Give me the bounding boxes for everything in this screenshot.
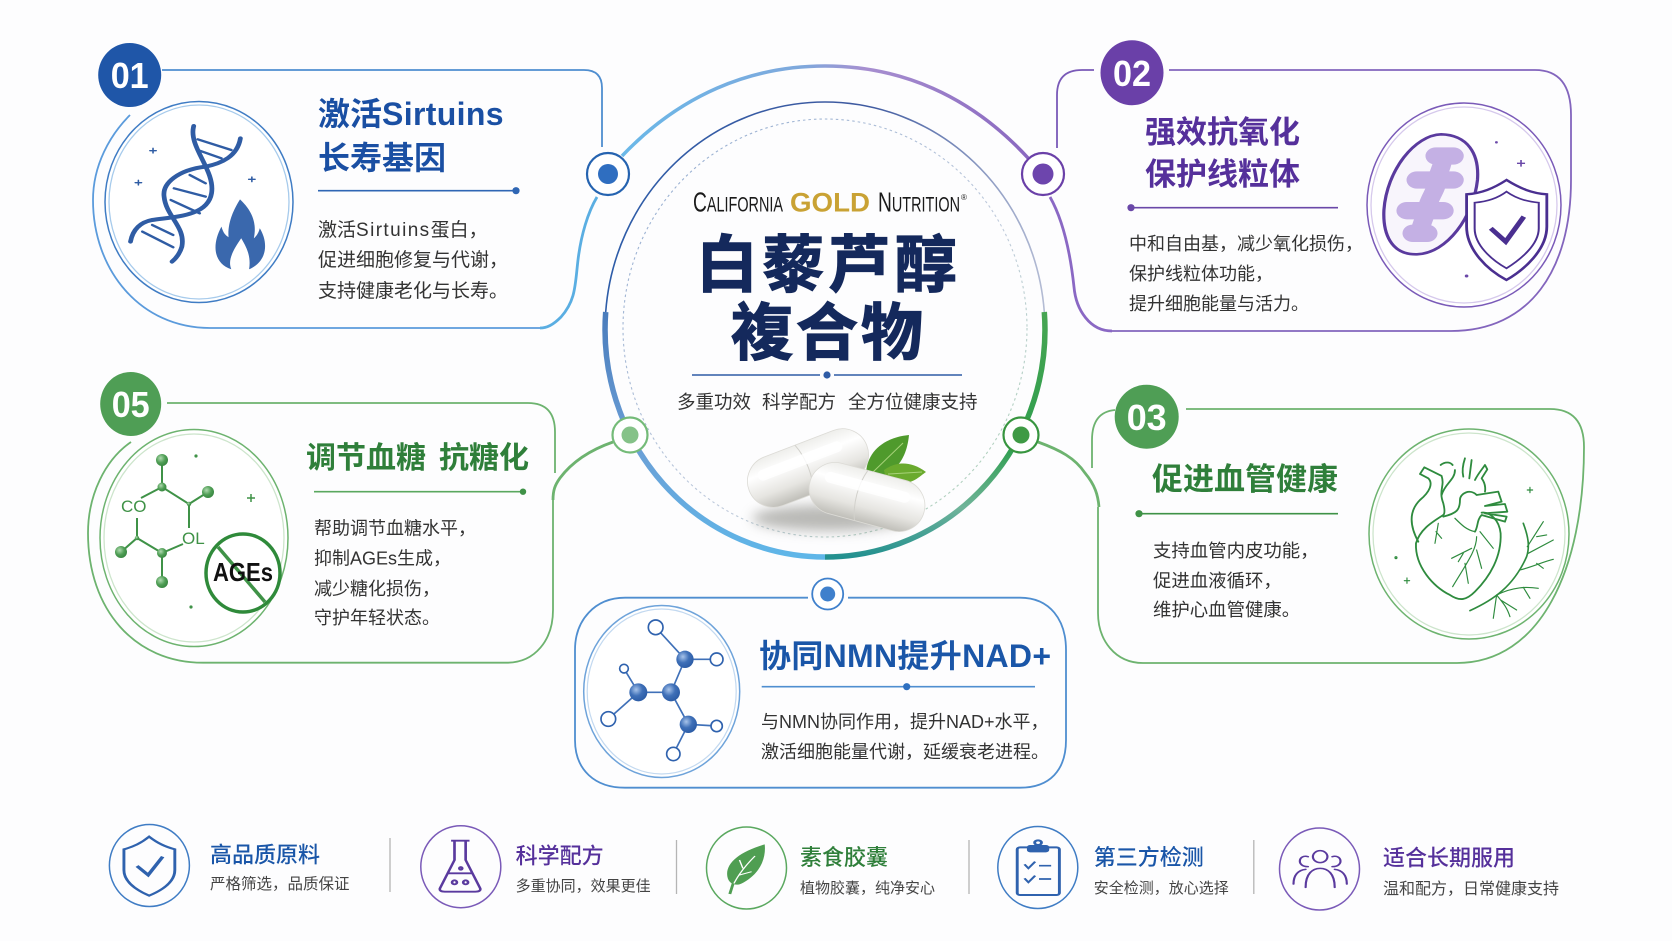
heading 05 bbox=[306, 442, 529, 475]
body 04: 与NMN协同作用，提升NAD+水平， bbox=[761, 712, 1049, 732]
badge 05: 05 bbox=[112, 384, 150, 425]
central ring bbox=[605, 66, 1045, 557]
body 04: 激活细胞能量代谢，延缓衰老进程。 bbox=[761, 742, 1049, 762]
icon: AGEs molecule: AGEs bbox=[213, 557, 273, 587]
icon: AGEs molecule: OL bbox=[182, 529, 205, 548]
card 05 outline bbox=[88, 403, 613, 663]
panel: card 05 bbox=[88, 372, 613, 663]
body 05: 帮助调节血糖水平， bbox=[314, 518, 476, 538]
subtitle: 多重功效 bbox=[677, 392, 751, 413]
title divider bbox=[692, 371, 962, 379]
divider 02 bbox=[1127, 204, 1338, 211]
panel: card 01 bbox=[93, 43, 602, 328]
icon: AGEs molecule bbox=[100, 430, 288, 646]
separator lines bbox=[390, 838, 1254, 894]
feature: third party test: 安全检测，放心选择 bbox=[1094, 879, 1229, 897]
title bbox=[696, 232, 961, 368]
body 01 bbox=[318, 219, 508, 302]
body 05: 抑制AGEs生成， bbox=[314, 548, 451, 568]
body 02: 提升细胞能量与活力。 bbox=[1129, 294, 1309, 314]
card 02 outline bbox=[1050, 70, 1571, 331]
feature: high quality bbox=[109, 824, 350, 906]
feature: long term bbox=[1280, 828, 1559, 910]
heading 01: 长寿基因 bbox=[318, 140, 446, 176]
feature: third party test: 第三方检测 bbox=[1094, 845, 1204, 870]
body 05: 守护年轻状态。 bbox=[314, 608, 440, 628]
heading 01: 激活Sirtuins bbox=[318, 96, 504, 132]
heading 02: 保护线粒体 bbox=[1145, 157, 1300, 192]
badge 02: 02 bbox=[1113, 53, 1151, 94]
logo: CALIFORNIA bbox=[693, 186, 783, 218]
body 01: 激活Sirtuins蛋白， bbox=[318, 219, 488, 241]
icon: DNA and flame bbox=[105, 102, 293, 302]
body 05 bbox=[314, 518, 476, 628]
badge 01 bbox=[98, 43, 161, 107]
divider 04 bbox=[762, 683, 1035, 690]
icon: mitochondrion and shield bbox=[1367, 103, 1561, 307]
badge 05 bbox=[100, 372, 161, 436]
title: 複合物 bbox=[731, 300, 926, 368]
node 01 bbox=[587, 153, 629, 195]
body 03: 支持血管内皮功能， bbox=[1153, 540, 1319, 561]
body 02: 中和自由基，减少氧化损伤， bbox=[1129, 234, 1363, 254]
badge 01: 01 bbox=[111, 55, 149, 96]
divider 05 bbox=[314, 488, 526, 495]
card 04 outline bbox=[575, 598, 1066, 788]
badge 02 bbox=[1100, 40, 1164, 105]
heading 02 bbox=[1145, 115, 1300, 192]
logo bbox=[693, 186, 967, 218]
logo: GOLD bbox=[790, 188, 870, 218]
feature: vegan capsule bbox=[706, 827, 935, 909]
feature: third party test bbox=[998, 826, 1229, 908]
body 03: 促进血液循环， bbox=[1153, 570, 1282, 591]
panel: feature strip bbox=[109, 824, 1559, 910]
feature: high quality: 严格筛选，品质保证 bbox=[210, 875, 350, 893]
body 01: 促进细胞修复与代谢， bbox=[318, 249, 508, 271]
card 03 outline bbox=[1038, 409, 1584, 663]
logo: NUTRITION bbox=[878, 186, 960, 218]
body 02 bbox=[1129, 234, 1363, 314]
panel: card 03 bbox=[1038, 385, 1584, 663]
body 02: 保护线粒体功能， bbox=[1129, 264, 1273, 284]
node 03 bbox=[1004, 418, 1038, 452]
subtitle: 全方位健康支持 bbox=[848, 392, 978, 413]
feature: vegan capsule: 植物胶囊，纯净安心 bbox=[800, 880, 935, 897]
capsules and leaves bbox=[740, 421, 931, 537]
feature: long term: 温和配方，日常健康支持 bbox=[1383, 880, 1559, 898]
feature: science formula bbox=[421, 826, 651, 908]
panel: card 04 bbox=[575, 598, 1066, 788]
connector nodes bbox=[587, 153, 1064, 610]
heading 05: 调节血糖 bbox=[306, 442, 426, 475]
badge 03 bbox=[1115, 385, 1179, 449]
feature: long term: 适合长期服用 bbox=[1383, 845, 1515, 870]
body 03 bbox=[1153, 540, 1319, 620]
heading 03: 促进血管健康 bbox=[1152, 462, 1338, 497]
body 05: 减少糖化损伤， bbox=[314, 579, 440, 599]
icon: heart and vessels bbox=[1369, 429, 1569, 639]
panel: center content bbox=[677, 186, 978, 537]
logo: ® bbox=[961, 193, 967, 202]
badge 03: 03 bbox=[1127, 397, 1167, 438]
title: 白藜芦醇 bbox=[696, 232, 961, 300]
subtitle bbox=[677, 392, 978, 413]
icon: AGEs molecule: CO bbox=[121, 497, 146, 516]
divider 03 bbox=[1135, 510, 1338, 517]
subtitle: 科学配方 bbox=[762, 392, 836, 413]
feature: science formula: 多重协同，效果更佳 bbox=[516, 878, 651, 895]
icon: molecule bbox=[584, 606, 740, 778]
node 02 bbox=[1022, 153, 1064, 195]
feature: high quality: 高品质原料 bbox=[210, 842, 320, 867]
heading 04: 协同NMN提升NAD+ bbox=[759, 638, 1051, 674]
body 03: 维护心血管健康。 bbox=[1153, 599, 1300, 620]
heading 01 bbox=[318, 96, 504, 176]
card 01 outline bbox=[93, 70, 602, 328]
body 04 bbox=[761, 712, 1049, 762]
heading 02: 强效抗氧化 bbox=[1145, 115, 1300, 150]
feature: science formula: 科学配方 bbox=[516, 843, 604, 868]
body 01: 支持健康老化与长寿。 bbox=[318, 280, 508, 302]
divider 01 bbox=[318, 187, 520, 194]
feature: vegan capsule: 素食胶囊 bbox=[800, 845, 888, 870]
panel: card 02 bbox=[1050, 40, 1571, 331]
heading 05: 抗糖化 bbox=[439, 442, 529, 475]
node 04 bbox=[812, 578, 843, 610]
node 05 bbox=[612, 418, 648, 452]
